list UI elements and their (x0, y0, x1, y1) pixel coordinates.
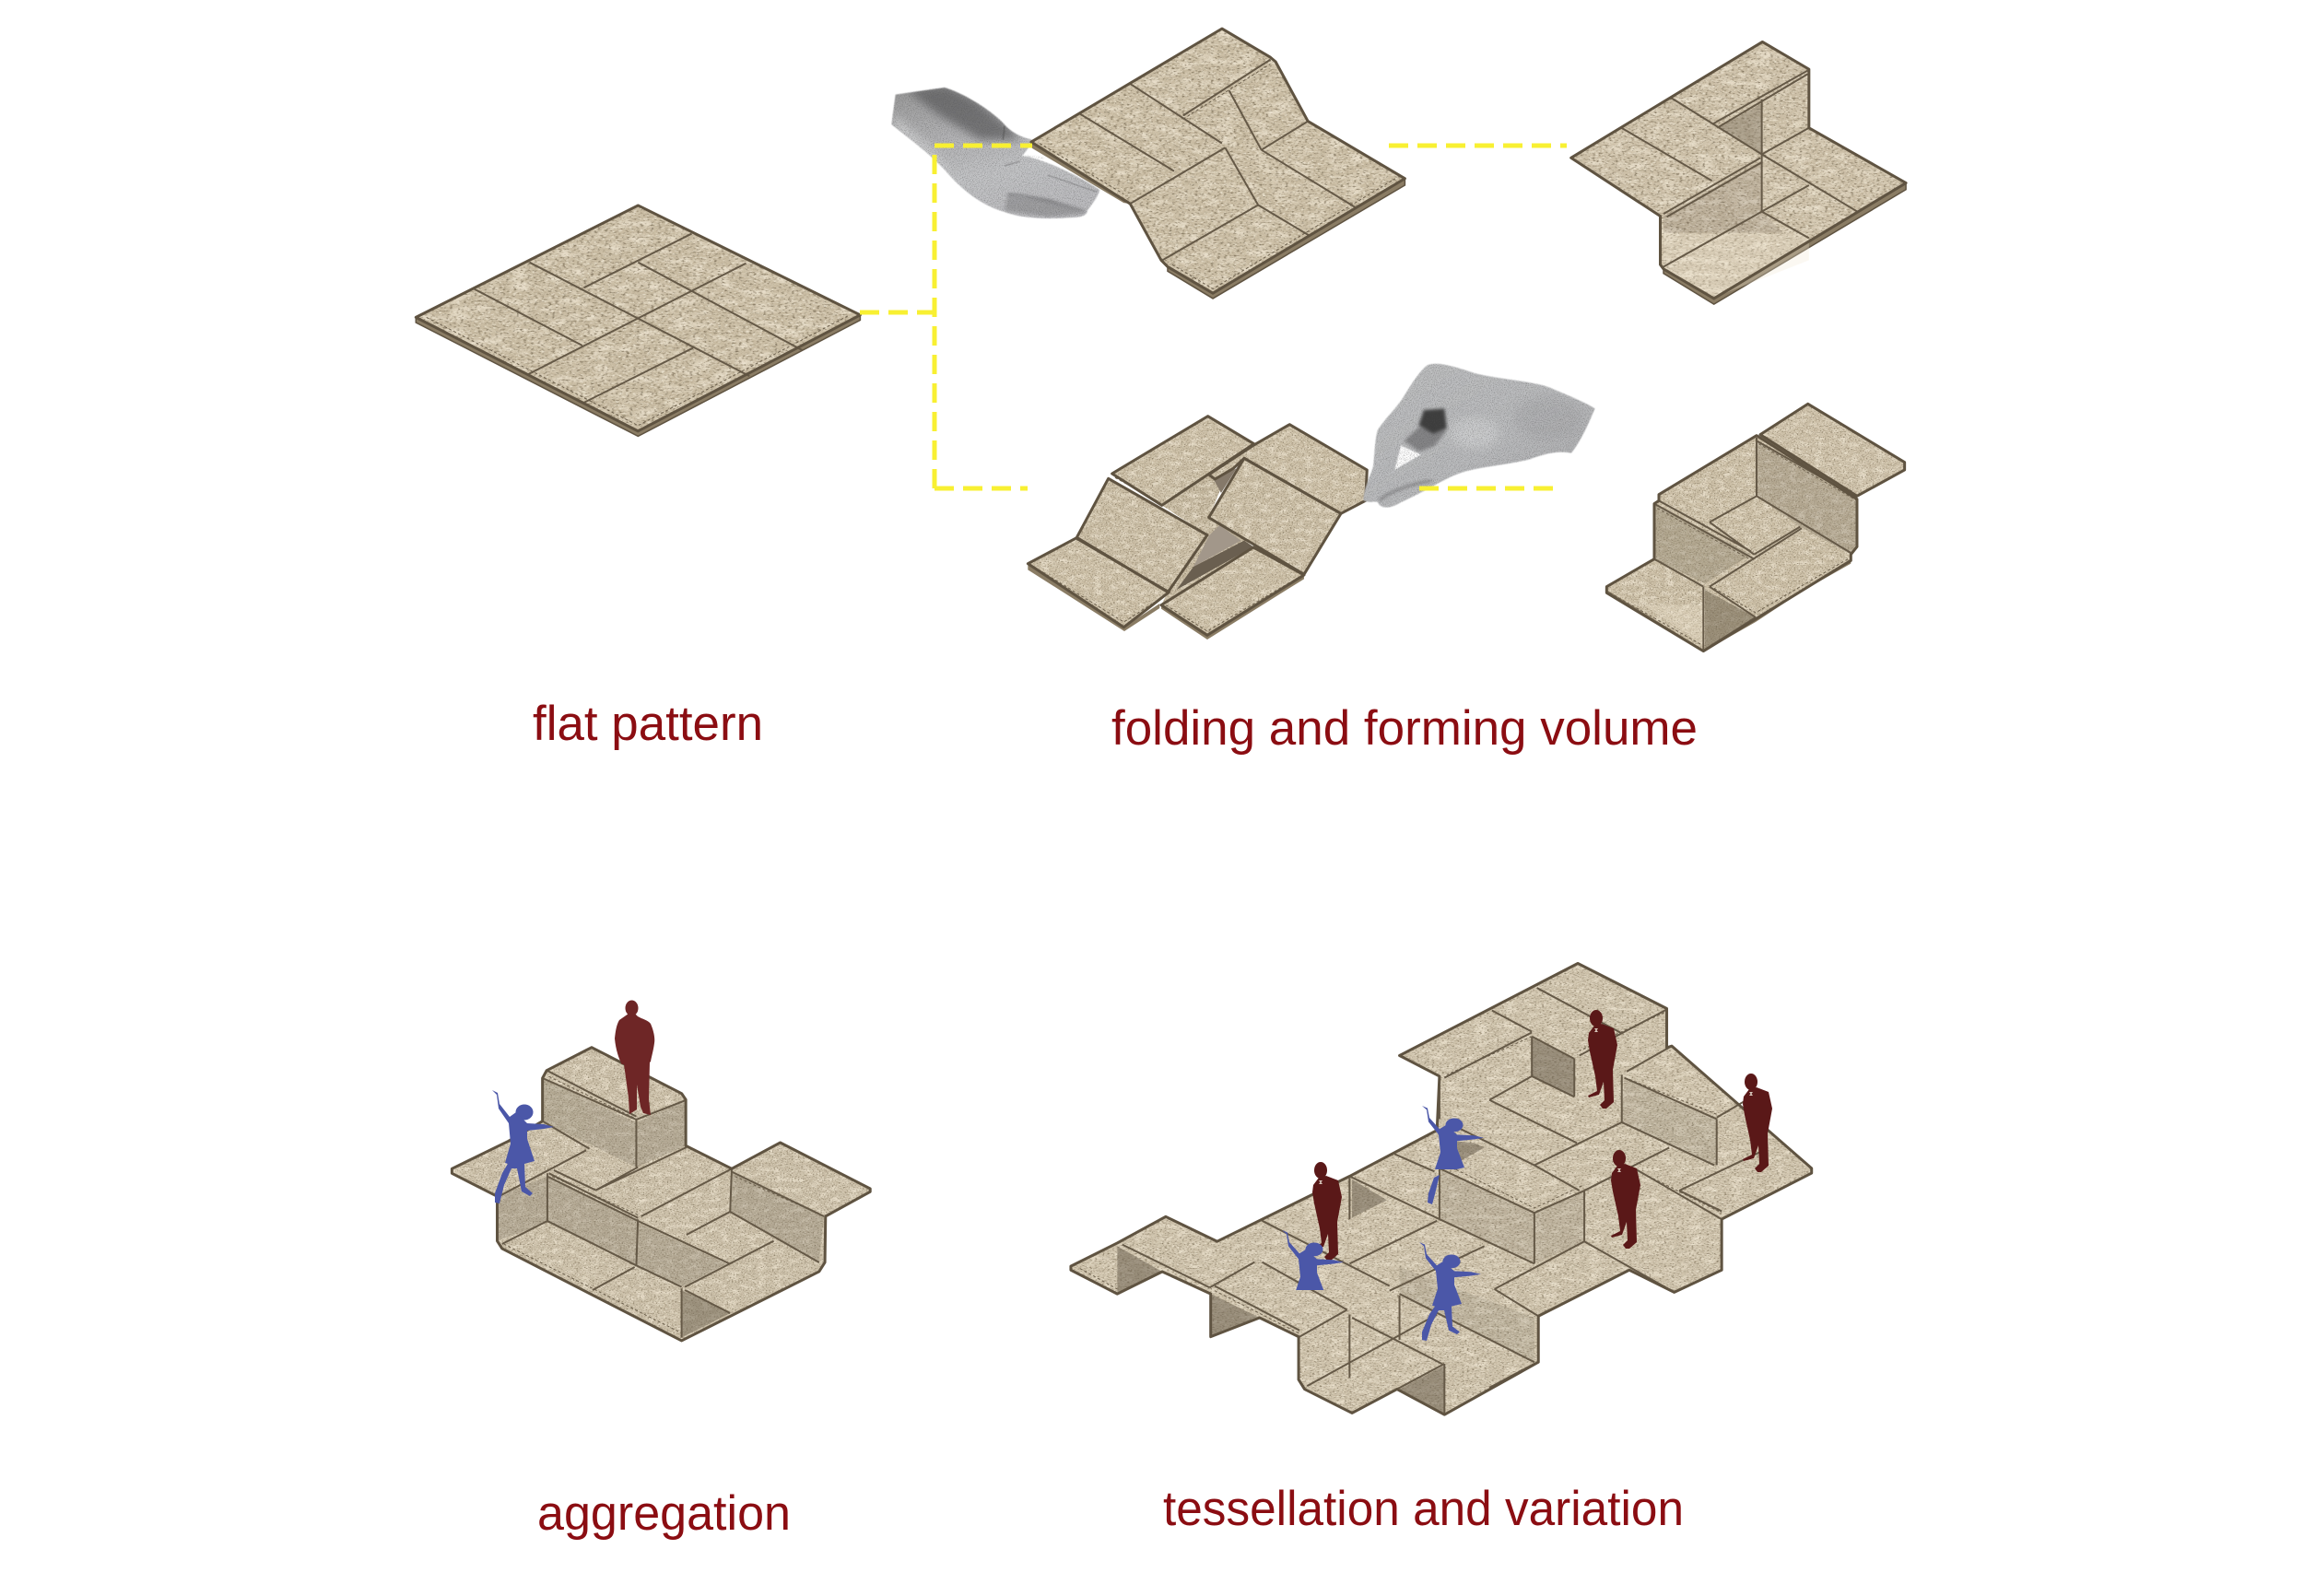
panel edge thickness (416, 315, 860, 436)
wood panel surface (1571, 41, 1906, 299)
wood surfaces (1071, 964, 1812, 1414)
fold lines (1621, 71, 1857, 266)
panel: flat pattern drawing (416, 205, 860, 436)
panel: aggregation drawing (452, 1048, 870, 1341)
wall shading (1400, 1078, 1717, 1362)
person: man on aggregation (615, 1001, 654, 1115)
outline (1071, 964, 1812, 1414)
panel: tessellation drawing (1071, 964, 1812, 1414)
stitching (1040, 64, 1395, 288)
wall shading (498, 1078, 824, 1287)
stitching (1034, 461, 1339, 631)
right wall shading (1757, 440, 1857, 555)
panel outlines (1606, 404, 1905, 651)
wood panels (1028, 417, 1367, 635)
fold lines (1123, 988, 1759, 1414)
hand shape (1358, 359, 1601, 513)
wood surfaces (452, 1048, 870, 1341)
panel: first folded volume (1571, 41, 1906, 304)
plank thickness (1028, 564, 1159, 631)
fold lines (1654, 438, 1857, 651)
grey inner fold (1193, 525, 1241, 567)
wood panel surface (416, 205, 860, 431)
dark recess (682, 1290, 730, 1338)
stitching (1610, 440, 1857, 645)
panel outline (416, 205, 860, 431)
hand: holding first fold (888, 83, 1103, 221)
light floor patch (1643, 605, 1703, 645)
panel: second folding stage (1028, 417, 1367, 640)
outline (452, 1048, 870, 1341)
hand: pinching second fold (1358, 359, 1601, 513)
dark recesses (1117, 1039, 1574, 1413)
person: woman 3 on tessellation (1419, 1242, 1481, 1341)
person: woman 2 on tessellation, legs hidden (1282, 1230, 1344, 1290)
wall shading (1719, 103, 1762, 154)
person: woman on aggregation (492, 1090, 554, 1203)
heading: flat pattern: flat pattern (533, 697, 763, 751)
panel edge thickness (1663, 183, 1906, 304)
person: woman 1 lower leg (1428, 1175, 1440, 1204)
wood surfaces (1606, 404, 1905, 650)
stitching (427, 315, 850, 426)
panel outline (1571, 41, 1906, 299)
light floor (1663, 234, 1809, 298)
fold lines (499, 1071, 824, 1338)
person: man 4 on tessellation (1312, 1162, 1342, 1261)
person: woman 1 upper body on tessellation (1422, 1106, 1484, 1169)
stitching (1080, 1013, 1722, 1333)
left wall shading (1654, 504, 1751, 583)
hand shape (888, 83, 1103, 221)
left edge thickness (1031, 142, 1130, 204)
fold lines (1080, 60, 1355, 260)
heading: aggregation: aggregation (537, 1486, 791, 1541)
dark folded gap upper (1214, 468, 1237, 493)
panel outline (1031, 29, 1405, 293)
front wall shadow (1705, 590, 1756, 650)
dashed yellow connectors (860, 146, 1567, 488)
person: man 3 on tessellation (1611, 1150, 1640, 1249)
person: man 2 on tessellation (1743, 1074, 1772, 1172)
plank edge thickness (1606, 559, 1851, 651)
stitching (504, 1076, 821, 1333)
heading: tessellation and variation: tessellation and variation (1163, 1482, 1684, 1536)
wall shading lower (1663, 161, 1783, 233)
person: man 1 on tessellation (1588, 1010, 1617, 1109)
wood panel surface (1031, 29, 1405, 293)
panel: first folding stage (1031, 29, 1405, 299)
front plank thickness (1161, 575, 1304, 640)
fold lines (475, 234, 803, 404)
dark folded gap lower (1177, 541, 1253, 590)
panel outlines (1028, 417, 1367, 635)
panel: second folded volume (1606, 404, 1905, 651)
panel edge thickness (1168, 179, 1405, 299)
heading: folding and forming volume: folding and forming volume (1111, 701, 1698, 756)
